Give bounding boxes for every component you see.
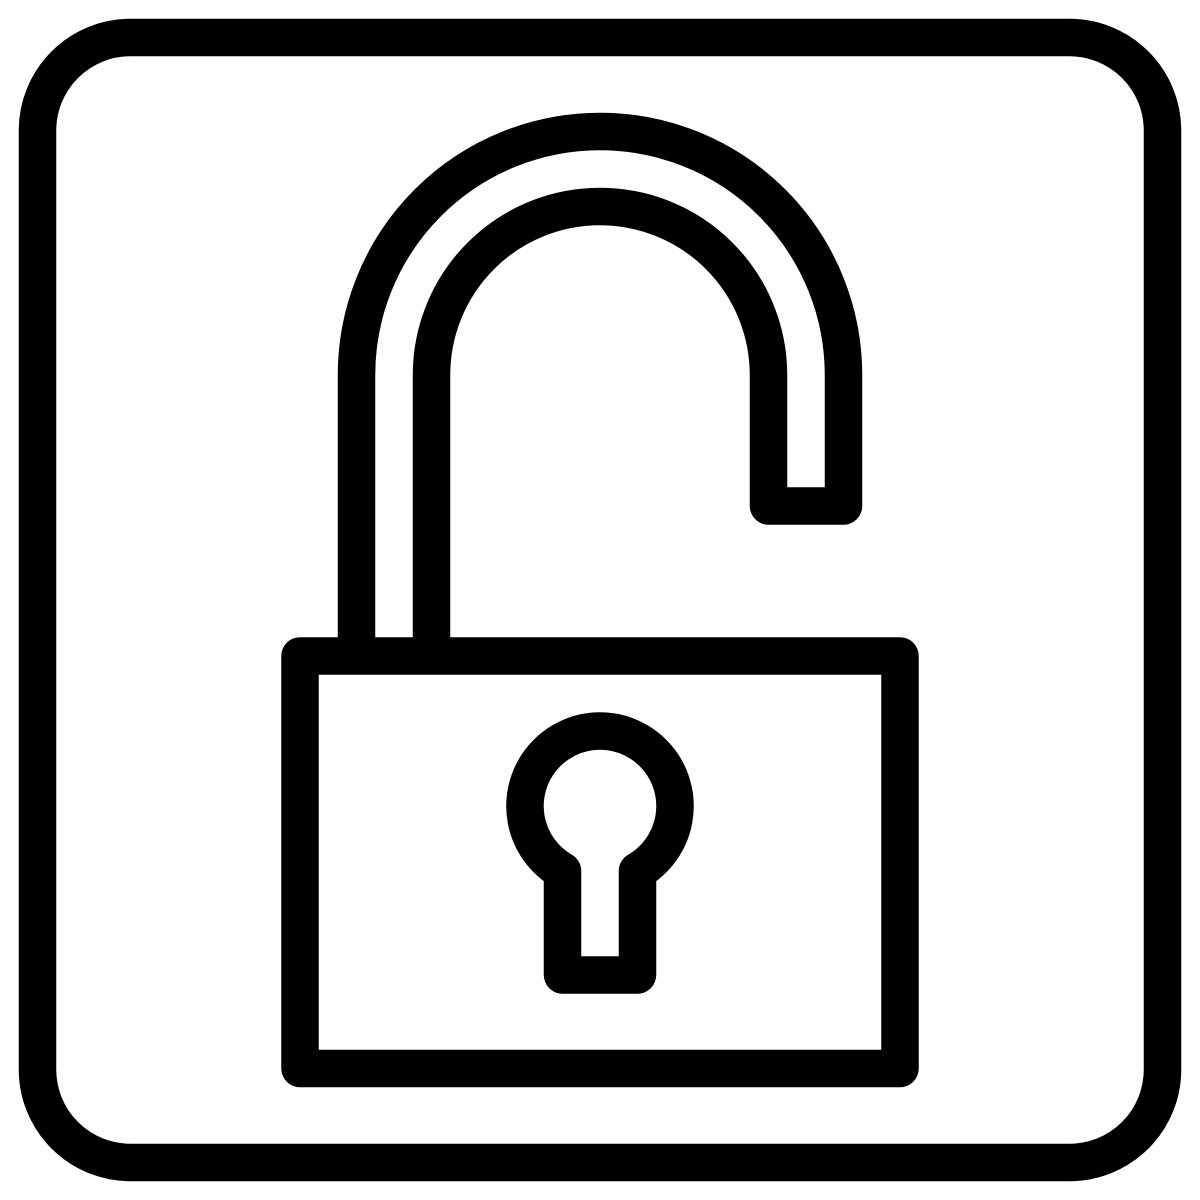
keyhole — [525, 731, 675, 975]
padlock body — [300, 656, 900, 1068]
padlock shackle — [356, 132, 844, 656]
